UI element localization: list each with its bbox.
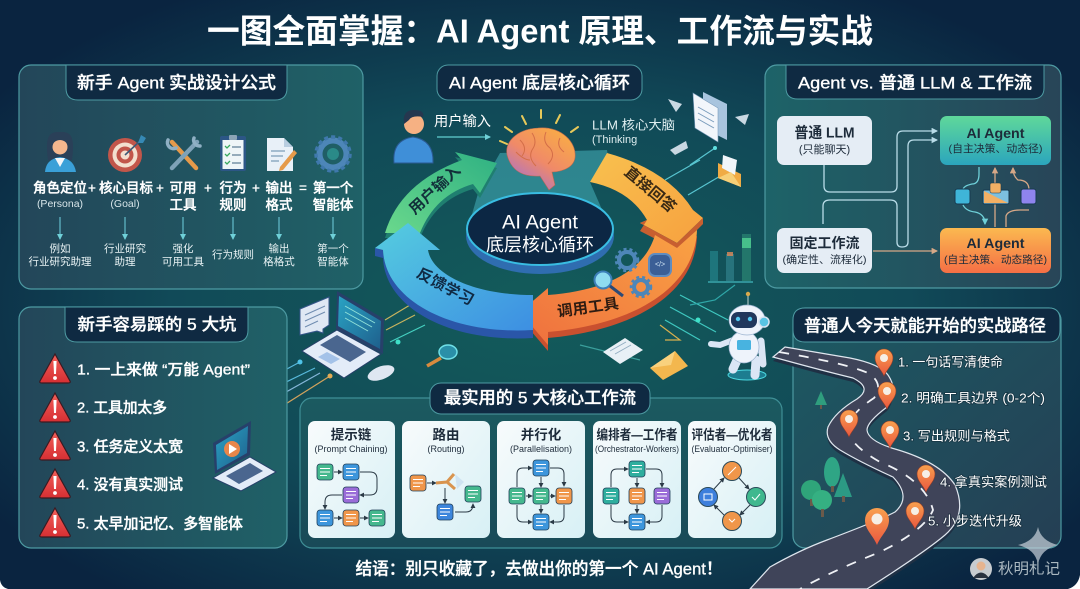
card: evaluator optimiser [688, 421, 776, 538]
formula english notes [37, 198, 140, 210]
pitfall list: 3. 任务定义太宽 [77, 438, 183, 456]
formula examples: 助理 [114, 255, 136, 268]
panel: beginner agent design formula [19, 65, 363, 289]
pitfall list: 5. 太早加记忆、多智能体 [77, 514, 243, 532]
formula labels: + [252, 180, 260, 196]
icon: tool gears and magnifier [594, 249, 671, 297]
formula labels: + [88, 180, 96, 196]
formula examples: 可用工具 [162, 256, 204, 268]
formula labels: 工具 [170, 198, 197, 212]
heading: route: 普通人今天就能开始的实战路径 [804, 316, 1046, 336]
box: fixed workflow [777, 228, 872, 273]
card: evaluator optimiser: 评估者—优化者 [692, 426, 772, 442]
card: prompt chaining [308, 421, 395, 538]
glass hexagon behind the brain [466, 150, 613, 235]
loop arrow: direct answer [590, 153, 703, 250]
formula labels: 角色定位 [33, 180, 87, 196]
card: prompt chaining: 提示链 [331, 426, 372, 442]
loop: core cycle [375, 150, 703, 351]
card: evaluator optimiser: (Evaluator-Optimiser) [692, 444, 772, 454]
formula examples: 例如 [50, 242, 70, 255]
card: prompt chaining: (Prompt Chaining) [314, 444, 388, 454]
pitfall list [40, 354, 250, 537]
icon: checklist [220, 135, 246, 171]
panel: agent vs LLM and workflows [765, 65, 1061, 288]
watermark: 秋明札记 [998, 560, 1060, 578]
loop arrow: feedback learning: 反馈学习 [414, 264, 477, 309]
card: orchestrator workers [593, 421, 681, 538]
formula examples: 智能体 [317, 255, 349, 268]
connectors [823, 131, 1029, 251]
watermark [970, 527, 1060, 580]
box: plain LLM: (只能聊天) [799, 142, 850, 156]
label: LLM brain: LLM 核心大脑 [592, 118, 675, 132]
formula examples: 格格式 [263, 255, 295, 268]
formula examples: 行业研究助理 [28, 255, 92, 268]
icon: paper and envelope [603, 338, 688, 380]
formula examples: 强化 [172, 242, 194, 255]
panel: five core workflows [300, 383, 782, 548]
pitfall list: 1. 一上来做 “万能 Agent” [77, 362, 250, 378]
route steps: 5. 小步迭代升级 [928, 514, 1022, 528]
icon: output document [267, 138, 297, 171]
loop arrow: feedback learning [375, 223, 533, 338]
heading: workflows [430, 383, 650, 414]
heading: formula [66, 65, 287, 100]
formula labels: = [299, 180, 307, 196]
heading: workflows: 最实用的 5 大核心工作流 [444, 388, 636, 408]
pitfall list: 2. 工具加太多 [77, 400, 167, 416]
formula examples: 第一个 [317, 242, 349, 255]
heading: pitfalls: 新手容易踩的 5 大坑 [78, 314, 236, 334]
card: routing: (Routing) [428, 444, 465, 454]
center heading: AI Agent 底层核心循环 [449, 74, 630, 92]
box: AI Agent orange: (自主决策、动态路径) [944, 253, 1047, 266]
icon: agent gear [316, 137, 350, 171]
card: parallelisation [497, 421, 585, 538]
box: AI Agent green [940, 116, 1051, 165]
formula examples: 行为规则 [212, 248, 254, 261]
center hub: 底层核心循环 [486, 235, 594, 255]
icon: user with input label: 用户输入 [434, 113, 491, 129]
formula labels: 规则 [220, 198, 246, 212]
formula labels [33, 180, 354, 212]
formula labels: + [156, 180, 164, 196]
icon: tool gears and magnifier: </> [655, 262, 665, 268]
icon: small magnifier [427, 345, 457, 366]
loop arrow: call tools: 调用工具 [556, 295, 620, 321]
card: routing [402, 421, 490, 538]
formula labels: 输出 [266, 180, 292, 196]
chart: holographic bars [708, 234, 753, 282]
panel: practical route [793, 308, 1061, 548]
panel: five pitfalls [19, 307, 287, 548]
route steps: 1. 一句话写清使命 [898, 354, 1003, 370]
center hub [466, 193, 614, 274]
formula labels: 智能体 [313, 196, 354, 212]
title: 一图全面掌握：AI Agent 原理、工作流与实战 [207, 12, 873, 50]
formula english notes: (Goal) [110, 198, 140, 210]
card: parallelisation: (Parallelisation) [510, 444, 572, 454]
route steps: 2. 明确工具边界 (0-2个) [901, 390, 1045, 406]
route steps [898, 354, 1047, 528]
box: fixed workflow: (确定性、流程化) [782, 253, 866, 266]
route steps: 3. 写出规则与格式 [903, 428, 1010, 444]
route steps: 4. 拿真实案例测试 [940, 474, 1047, 490]
center heading [437, 65, 642, 100]
card: routing: 路由 [432, 428, 460, 442]
card: orchestrator workers: (Orchestrator-Workers) [595, 444, 679, 454]
icon: brain [500, 110, 578, 190]
box: plain LLM [777, 116, 872, 165]
formula labels: 第一个 [313, 180, 354, 196]
icon: tools [167, 138, 200, 168]
icon: large laptop [300, 291, 396, 384]
icon: user with input label [394, 110, 491, 163]
box: plain LLM: 普通 LLM [794, 124, 854, 142]
icon: persona [45, 132, 76, 172]
box: AI Agent orange: AI Agent [966, 235, 1025, 251]
formula labels: 格式 [266, 198, 293, 212]
formula examples: 行业研究 [104, 242, 146, 255]
formula labels: 行为 [220, 180, 246, 196]
heading: route [793, 308, 1060, 342]
label: LLM brain: (Thinking [592, 134, 637, 146]
loop arrow: call tools [520, 230, 697, 351]
formula labels: 核心目标 [99, 180, 153, 196]
formula labels: + [204, 180, 212, 196]
heading: formula: 新手 Agent 实战设计公式 [77, 72, 276, 92]
heading: pitfalls [65, 307, 248, 342]
card: parallelisation: 并行化 [521, 426, 562, 442]
conclusion: 结语：别只收藏了，去做出你的第一个 AI Agent！ [356, 560, 722, 578]
formula examples [28, 242, 349, 268]
heading: comparison [786, 65, 1044, 99]
circuit lines in the central scene [243, 146, 735, 452]
pitfall list: 4. 没有真实测试 [77, 476, 183, 494]
icon: target [108, 135, 146, 172]
small tool squares [955, 183, 1036, 204]
formula labels: 可用 [170, 180, 196, 196]
card: orchestrator workers: 编排者—工作者 [596, 426, 678, 442]
box: AI Agent green: (自主决策、动态径) [948, 142, 1042, 155]
corner tips [0, 575, 1080, 589]
icon: documents and envelope [668, 92, 749, 187]
loop arrow: user input [385, 152, 497, 238]
formula english notes: (Persona) [37, 198, 83, 210]
icon: trees [801, 391, 852, 517]
box: fixed workflow: 固定工作流 [790, 235, 860, 251]
loop arrow: direct answer: 直接回答 [621, 163, 680, 216]
icon: small laptop with video [213, 421, 276, 491]
heading: comparison: Agent vs. 普通 LLM & 工作流 [798, 74, 1032, 92]
icon: robot [711, 292, 769, 380]
box: AI Agent orange [940, 228, 1051, 273]
route pins [840, 349, 935, 545]
loop arrow: user input: 用户输入 [405, 161, 464, 218]
label: LLM brain [592, 118, 675, 146]
road [750, 347, 960, 589]
center hub: AI Agent [502, 212, 579, 234]
formula examples: 输出 [268, 242, 290, 255]
formula down arrows [60, 217, 333, 239]
box: AI Agent green: AI Agent [966, 125, 1025, 141]
